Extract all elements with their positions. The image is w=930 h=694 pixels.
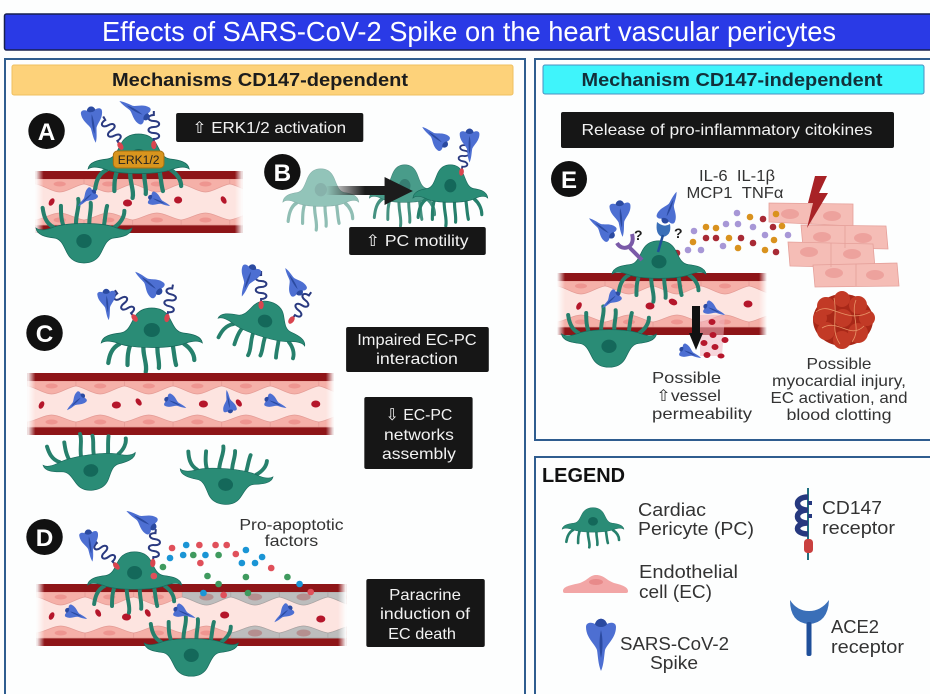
purple receptor [617,234,642,260]
callout: paracrine induction of EC death [366,579,485,647]
text: CD147 receptor [822,498,895,538]
ERK1/2 badge: ERK1/2 [118,153,160,167]
text: ACE2 receptor: ACE2 [831,617,879,637]
cytokine dots [674,210,791,256]
pro-apoptotic factor dots [150,542,314,598]
vessel D [36,584,346,646]
text: CD147 receptor: CD147 [822,498,882,518]
callout: impaired EC-PC interaction: Impaired EC-PC [357,331,477,349]
text: possible vessel permeability: Possible [652,370,721,387]
label C [26,315,63,351]
heading: mechanism CD147-independent: Mechanism CD147-independent [582,70,882,90]
text: possible vessel permeability: permeability [652,406,752,423]
section B: PC motility [264,120,488,255]
ACE2 receptor [657,222,670,252]
cardiomyocytes [769,203,899,287]
text: cardiac pericyte [638,500,754,539]
vessel A [35,171,243,233]
label E: E [561,167,577,194]
pericyte with ERK1/2 [80,93,189,198]
question marks: ? [634,227,643,243]
label: pro-apoptotic factors [239,516,344,550]
lower pericyte A [36,199,132,263]
label E [551,161,587,197]
icon: blood clot [813,291,875,349]
icon: lightning injury [807,176,828,228]
vessel C [27,373,334,435]
panel: mechanism CD147-independent [535,59,930,440]
callout: ERK1/2 activation [176,113,363,142]
heading: mechanism CD147-independent [543,65,924,94]
small spikes C [62,389,289,415]
callout: release of pro-inflammatory citokines [561,112,894,148]
text: possible vessel permeability [652,370,752,423]
text: possible myocardial injury: Possible [806,356,872,373]
callout: PC motility: ⇧ PC motility [365,232,469,250]
moving pericytes [283,120,488,230]
section C: impaired interaction [26,261,489,508]
cytokine names: MCP1 TNFα [686,185,784,202]
text: possible myocardial injury [770,356,908,424]
icon: endothelial cell [563,575,628,593]
callout: paracrine induction of EC death: Paracrine [389,586,461,604]
icon: cardiac pericyte [562,508,624,547]
heading: legend: LEGEND [542,465,625,487]
question marks [634,225,683,243]
lower pericyte E [562,306,656,367]
callout: EC-PC networks assembly: assembly [382,445,456,463]
small spikes D [63,601,296,627]
arrow: permeability [689,306,703,350]
label B [264,154,301,190]
title: Effects of SARS-CoV-2 Spike on the heart vascular pericytes [102,16,836,47]
text: SARS-CoV-2 spike [620,634,729,673]
callout: EC-PC networks assembly [364,397,473,469]
text: possible myocardial injury: EC activation, and [770,390,908,407]
label B: B [274,160,291,187]
icon: CD147 receptor [798,488,813,560]
callout: paracrine induction of EC death: EC death [388,625,456,643]
small spikes A [73,185,173,212]
callout: EC-PC networks assembly: networks [384,426,454,444]
panel: legend [535,457,930,694]
callout: release of pro-inflammatory citokines: Release of pro-inflammatory citokines [582,122,872,139]
vascular leak [700,315,728,358]
label D [26,519,63,555]
pericytes above vessel C [97,261,316,372]
vessel E [557,273,767,335]
pericytes below vessel C [39,427,275,508]
text: possible vessel permeability: ⇧vessel [656,388,721,405]
text: SARS-CoV-2 spike: Spike [650,653,698,673]
callout: PC motility [349,227,486,255]
text: ACE2 receptor [831,617,904,657]
text: SARS-CoV-2 spike: SARS-CoV-2 [620,634,729,654]
text: endothelial cell [639,562,738,602]
callout: ERK1/2 activation: ⇧ ERK1/2 activation [192,119,346,137]
text: endothelial cell: cell (EC) [639,582,712,602]
text: endothelial cell: Endothelial [639,562,738,582]
cytokine names [686,168,784,202]
text: CD147 receptor: receptor [822,518,895,538]
question marks: ? [674,225,683,241]
lower pericyte D [144,615,238,676]
text: ACE2 receptor: receptor [831,637,904,657]
icon: SARS-CoV-2 spike [586,619,616,671]
heading: mechanisms CD147-dependent: Mechanisms CD147-dependent [112,70,408,90]
small spikes E [598,287,728,364]
label: pro-apoptotic factors: Pro-apoptotic [239,516,344,534]
icon: ACE2 receptor [790,600,829,656]
text: cardiac pericyte: Cardiac [638,500,706,520]
pericyte with receptors [584,188,706,302]
arrow: migration [326,177,413,205]
label: pro-apoptotic factors: factors [265,532,318,550]
text: possible myocardial injury: blood clotting [786,407,892,424]
cytokine names: IL-6 IL-1β [699,168,775,185]
callout: impaired EC-PC interaction [346,327,489,372]
label A: A [38,119,55,146]
label D: D [36,525,53,552]
callout: impaired EC-PC interaction: interaction [376,350,458,368]
text: cardiac pericyte: Pericyte (PC) [638,519,754,539]
pericyte releasing factors [79,503,182,613]
callout: paracrine induction of EC death: induction of [380,605,471,623]
text: possible myocardial injury: myocardial injury, [772,373,906,390]
heading: mechanisms CD147-dependent [12,65,513,95]
label A [28,113,65,149]
callout: EC-PC networks assembly: ⇩ EC-PC [386,406,452,424]
section D: paracrine EC death [26,503,485,676]
section A: ERK1/2 activation [28,93,363,263]
label C: C [36,321,53,348]
